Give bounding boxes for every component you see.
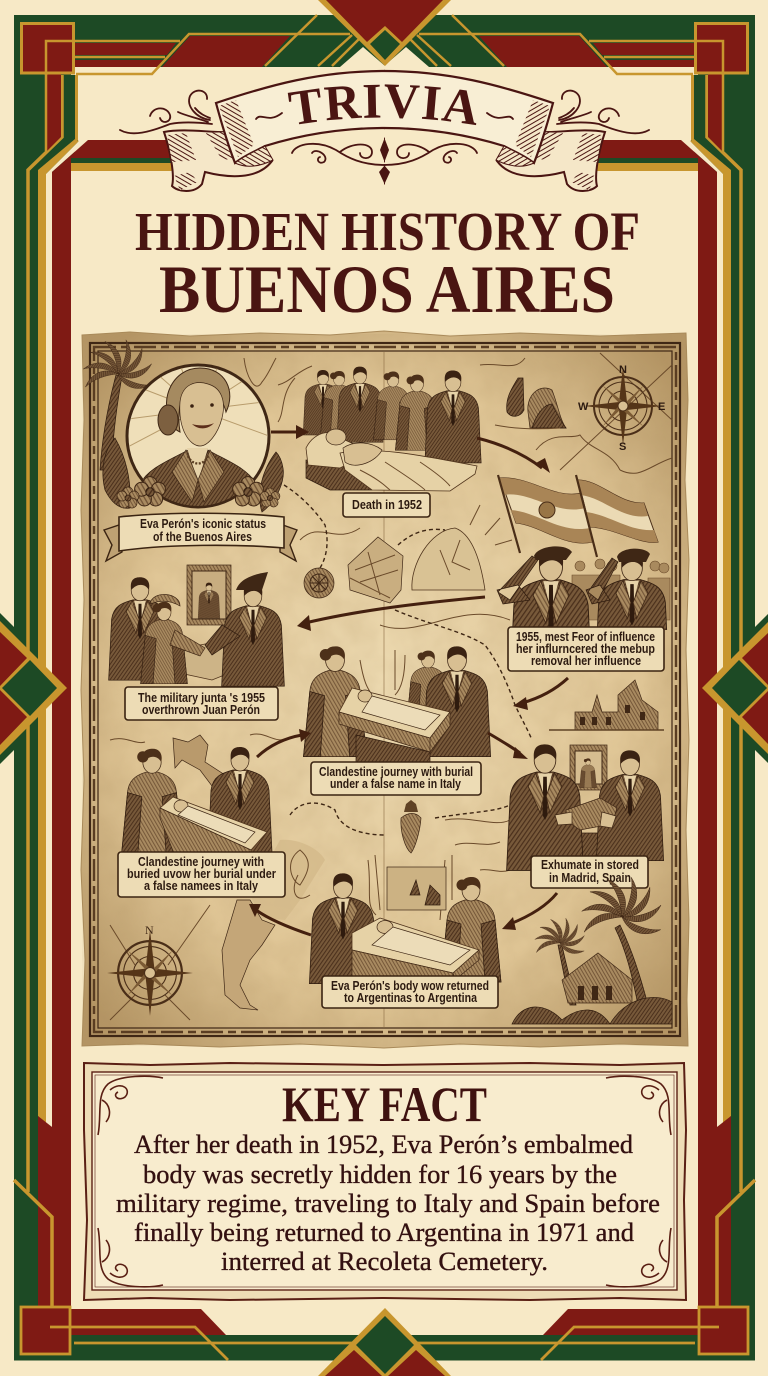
label: body returned: Eva Perón's body wow returned (331, 979, 489, 993)
flags (498, 475, 658, 557)
arrow: soldiers to junta (297, 597, 485, 631)
compass rose, top right: N (619, 364, 627, 376)
skyline sketch (549, 680, 664, 730)
key fact body text: interred at Recoleta Cemetery. (221, 1247, 548, 1276)
text: death in 1952: Death in 1952 (352, 498, 422, 512)
key fact body text: military regime, traveling to Italy and Spain before (116, 1189, 660, 1218)
scene: clandestine journey centre (304, 646, 491, 762)
label: 1955 influence: her influrncered the mebup (516, 642, 655, 656)
compass rose, top right: S (619, 441, 626, 453)
crest with crown (401, 800, 421, 853)
label: exhumed in Madrid: in Madrid, Spain (549, 871, 631, 885)
ship and rock sketch (495, 378, 566, 429)
central map fragment and rock (348, 505, 512, 603)
label: clandestine journey left (118, 852, 285, 897)
label: military junta: The military junta 's 1955 (138, 691, 265, 705)
compass rose, top right: E (658, 401, 665, 413)
key fact body text (116, 1130, 660, 1276)
label: 1955 influence: removal her influence (531, 654, 641, 668)
compass rose, bottom left (107, 923, 193, 1016)
label: death in 1952 (343, 493, 430, 517)
arrow: portrait to death (271, 425, 309, 439)
scene: junta handshake (109, 565, 284, 686)
label: clandestine journey left: a false namees in Italy (144, 879, 258, 893)
label: clandestine journey left: buried uvow her burial under (127, 867, 276, 881)
arrow: death to flags (477, 438, 550, 473)
scene: death in 1952 (303, 367, 481, 517)
palm tree, top left (82, 338, 154, 470)
label: body returned (322, 976, 498, 1008)
arrow: Madrid to returned (502, 893, 557, 930)
label: 1955 influence (508, 627, 664, 671)
label: clandestine burial centre (311, 762, 481, 795)
compass rose, bottom left: N (145, 923, 154, 937)
main title: BUENOS AIRES (159, 251, 615, 327)
label: clandestine journey left: Clandestine journey with (138, 855, 264, 869)
scene: body returned (309, 855, 501, 984)
South America outline (222, 840, 325, 1010)
trivia ribbon banner (119, 70, 650, 192)
key fact panel (84, 1063, 686, 1300)
main title: HIDDEN HISTORY OF (135, 201, 640, 262)
parchment map panel (81, 331, 689, 1048)
label: 1955 influence: 1955, mest Feor of influence (516, 630, 655, 644)
banner label: iconic status: Eva Perón's iconic status (140, 517, 266, 531)
label: clandestine burial centre: under a false name in Italy (330, 777, 461, 791)
key fact body text: body was secretly hidden for 16 years by the (143, 1160, 617, 1189)
compass rose, top right (578, 364, 665, 453)
label: military junta: overthrown Juan Perón (142, 703, 260, 717)
scene: left coffin with Italy map (121, 735, 272, 856)
palm scene, bottom right (512, 876, 672, 1024)
label: body returned: to Argentinas to Argentina (344, 991, 478, 1005)
compass rose, top right: W (578, 401, 589, 413)
arrow: left scene to centre scene (257, 729, 311, 757)
soldiers saluting (496, 546, 670, 630)
banner label: iconic status: of the Buenos Aires (153, 530, 252, 544)
medallion (304, 568, 334, 598)
corner flourishes (98, 1076, 671, 1287)
key fact body text: finally being returned to Argentina in 1971 and (134, 1218, 634, 1247)
arrow: returned to South America (249, 904, 311, 935)
portrait of Eva Perón (102, 364, 284, 512)
scene: exhumed in Madrid (507, 744, 664, 870)
label: clandestine burial centre: Clandestine journey with burial (319, 765, 473, 779)
arrow: 1955 box to burial (513, 678, 568, 710)
key fact heading: KEY FACT (282, 1076, 487, 1132)
label: military junta (125, 687, 278, 720)
ribbon word: TRIVIA (288, 84, 476, 126)
faint map coastlines and routes (110, 353, 672, 1020)
key fact body text: After her death in 1952, Eva Perón’s embalmed (134, 1130, 633, 1159)
main title (135, 201, 640, 327)
banner label: iconic status (104, 513, 297, 561)
label: exhumed in Madrid: Exhumate in stored (541, 858, 639, 872)
arrow: centre scene to Madrid (488, 733, 528, 759)
label: exhumed in Madrid (531, 856, 648, 888)
